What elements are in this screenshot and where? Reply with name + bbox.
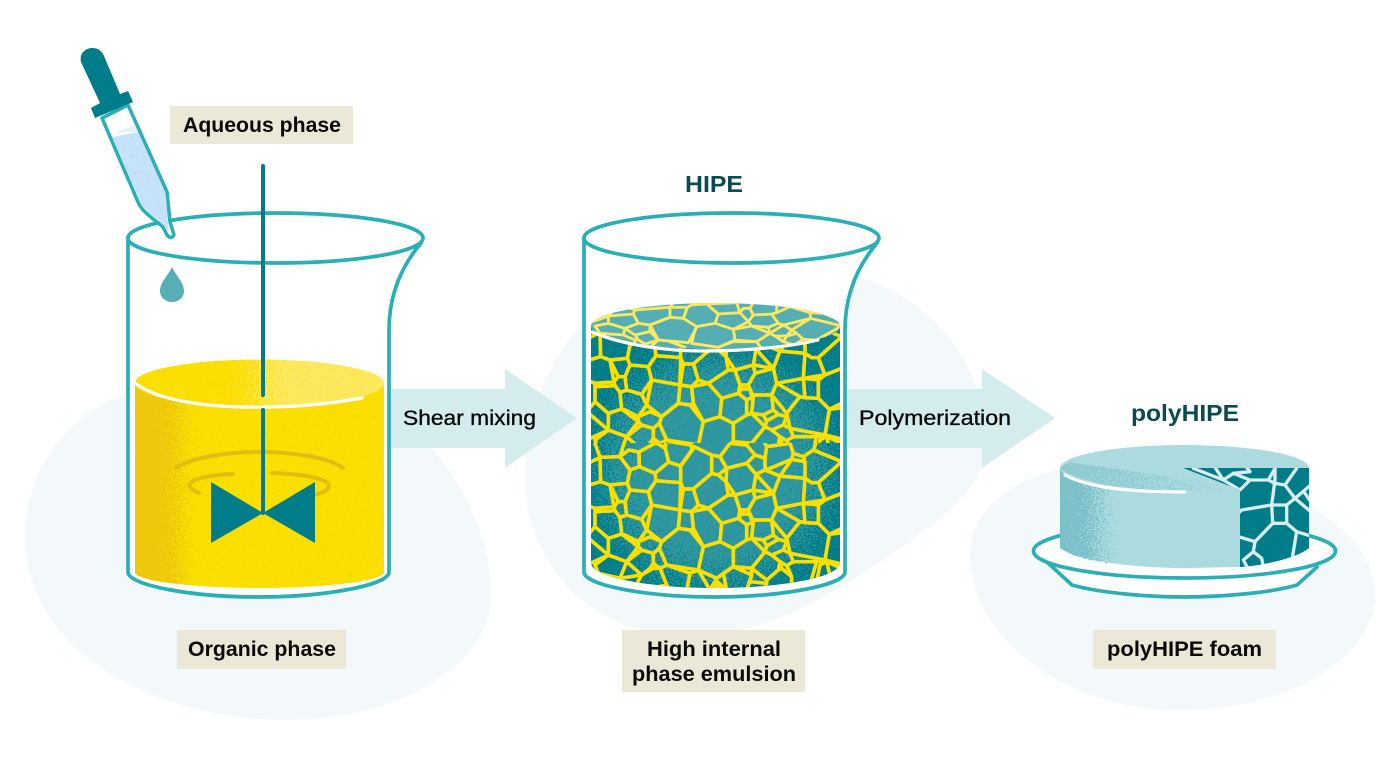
- background blob: middle: [525, 261, 987, 636]
- label: polyHIPE foam: polyHIPE foam: [1107, 638, 1262, 661]
- polyHIPE foam on plate: [1034, 445, 1336, 597]
- dropper liquid: [112, 126, 169, 232]
- emulsion bottom yellow fill: [710, 580, 727, 588]
- emulsion cell network lower: [587, 437, 842, 590]
- heading: polyHIPE: polyHIPE: [1131, 400, 1239, 426]
- icon: water drop: [160, 267, 184, 302]
- foam cut face: [1180, 465, 1312, 570]
- plate: [1034, 524, 1336, 597]
- arrow label: shear mixing: Shear mixing: [403, 407, 536, 430]
- label: polyHIPE foam: [1093, 630, 1276, 669]
- heading: HIPE: HIPE: [685, 171, 743, 197]
- foam highlight: [1065, 475, 1185, 492]
- foam cell network: [1193, 467, 1311, 567]
- beaker 2 rim: [584, 213, 879, 263]
- label: aqueous phase: [170, 106, 353, 144]
- stirrer impeller: [211, 482, 315, 543]
- emulsion highlight: [592, 332, 818, 351]
- beaker 1 rim: [128, 213, 423, 263]
- background blob: left: [25, 375, 491, 720]
- beaker 1 glass body: [128, 238, 421, 597]
- arrow: shear mixing: [375, 369, 577, 468]
- background blob: right: [970, 459, 1376, 710]
- organic phase liquid: [135, 360, 384, 588]
- foam top surface: [1060, 445, 1309, 491]
- label: aqueous phase: Aqueous phase: [183, 114, 341, 137]
- beaker 2 glass body: [584, 238, 877, 597]
- dropper bulb and collar: [81, 48, 133, 118]
- emulsion top cell network: [590, 302, 842, 349]
- label: high internal phase emulsion: [622, 630, 805, 692]
- dropper glass: [102, 105, 174, 238]
- arrow: polymerization: [835, 369, 1055, 468]
- foam cake body: [1060, 468, 1240, 568]
- label: high internal phase emulsion: phase emulsion: [632, 663, 796, 686]
- icon: dropper: [81, 48, 174, 238]
- beaker 2 with HIPE: [584, 213, 879, 597]
- emulsion side: [591, 326, 840, 588]
- label: organic phase: Organic phase: [188, 638, 336, 661]
- emulsion top surface: [590, 302, 842, 351]
- label: high internal phase emulsion: High internal: [647, 638, 781, 661]
- label: organic phase: [177, 630, 346, 669]
- stirrer rod: [261, 166, 265, 513]
- emulsion cell network upper: [591, 332, 840, 443]
- stirrer swirl lines: [176, 452, 343, 496]
- arrow label: polymerization: Polymerization: [859, 407, 1011, 430]
- foam top stipple: [1060, 462, 1240, 491]
- beaker 1 with organic phase: [128, 166, 423, 597]
- foam stipple: [1060, 468, 1118, 565]
